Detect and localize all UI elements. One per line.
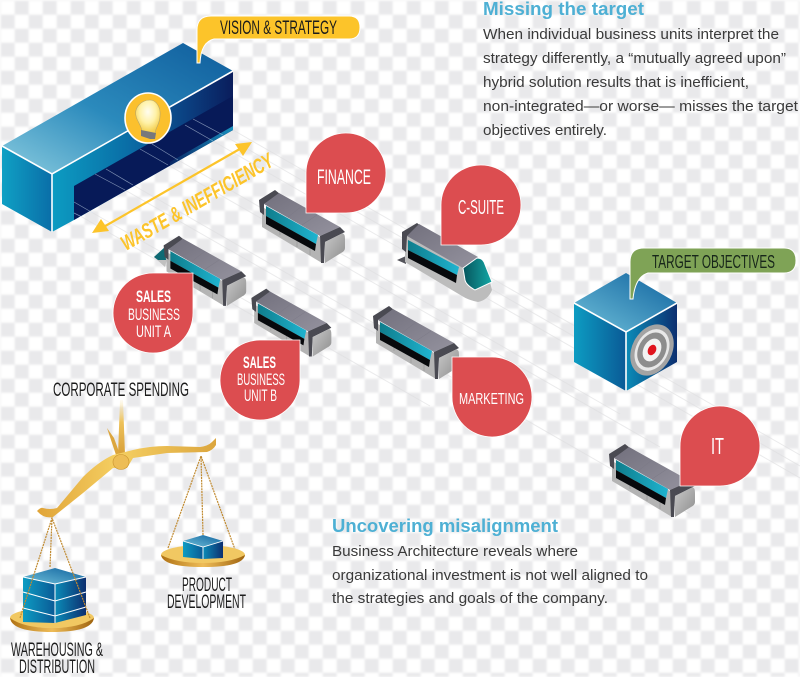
bubble: c-suite — [441, 165, 521, 245]
chart: balance scale — [10, 400, 245, 632]
label: product development: PRODUCT — [182, 575, 232, 596]
bubble: finance — [306, 133, 386, 213]
bubble: sales business unit B: BUSINESS — [237, 370, 285, 389]
text block: uncovering misalignment — [332, 516, 648, 607]
bubble: finance: FINANCE — [317, 166, 371, 189]
text block: missing the target — [483, 0, 799, 139]
text block: uncovering misalignment: organizational investment is not well aligned to — [332, 567, 648, 584]
callout: vision and strategy — [197, 16, 360, 63]
icon: light bulb — [125, 93, 171, 143]
text block: missing the target: non-integrated—or worse— misses the target — [483, 98, 799, 115]
bubble: c-suite: C-SUITE — [458, 197, 504, 219]
bubble: IT — [680, 406, 760, 486]
left pan with stacked cubes — [10, 518, 94, 632]
label: product development: DEVELOPMENT — [167, 592, 246, 613]
label: warehousing and distribution: WAREHOUSING & — [11, 640, 103, 661]
gold beam — [37, 400, 216, 517]
train: finance — [259, 190, 345, 263]
train: IT — [609, 444, 695, 517]
arrow: waste and inefficiency — [92, 142, 279, 255]
text block: missing the target: objectives entirely. — [483, 122, 607, 139]
label: warehousing and distribution — [11, 640, 103, 677]
bubble: sales business unit B: SALES — [243, 353, 276, 372]
text block: uncovering misalignment: Uncovering misalignment — [332, 516, 558, 536]
bubble: sales business unit B: UNIT B — [244, 386, 277, 405]
text block: missing the target: hybrid solution results that is inefficient, — [483, 74, 749, 91]
arrow: waste and inefficiency: WASTE & INEFFICIENCY — [117, 149, 279, 255]
train: sales business unit A — [154, 236, 246, 306]
big building: vision and strategy — [2, 43, 233, 232]
text block: missing the target: strategy differently, a “mutually agreed upon” — [483, 50, 786, 67]
train: sales business unit B — [251, 289, 331, 357]
text block: missing the target: When individual business units interpret the — [483, 26, 779, 43]
right pan with cube — [161, 456, 245, 567]
bubble: sales business unit A — [113, 273, 193, 353]
bubble: marketing — [452, 357, 532, 437]
train: marketing — [373, 306, 459, 379]
heading: corporate spending: CORPORATE SPENDING — [53, 380, 189, 401]
bubble: IT: IT — [711, 433, 724, 459]
text block: uncovering misalignment: Business Architecture reveals where — [332, 543, 578, 560]
track lines — [82, 130, 800, 514]
train: c-suite — [397, 223, 492, 302]
bubble: sales business unit A: BUSINESS — [128, 305, 180, 324]
icon: target cube — [574, 273, 682, 391]
bubble: sales business unit A: SALES — [136, 287, 171, 306]
callout: target objectives — [630, 248, 796, 299]
bubble: sales business unit A: UNIT A — [136, 322, 171, 341]
bubble: marketing: MARKETING — [459, 391, 524, 408]
icon: bullseye — [622, 317, 682, 383]
text block: uncovering misalignment: the strategies and goals of the company. — [332, 590, 608, 607]
bubble: sales business unit B — [220, 340, 300, 420]
callout: vision and strategy: VISION & STRATEGY — [220, 18, 337, 39]
label: product development — [167, 575, 246, 613]
